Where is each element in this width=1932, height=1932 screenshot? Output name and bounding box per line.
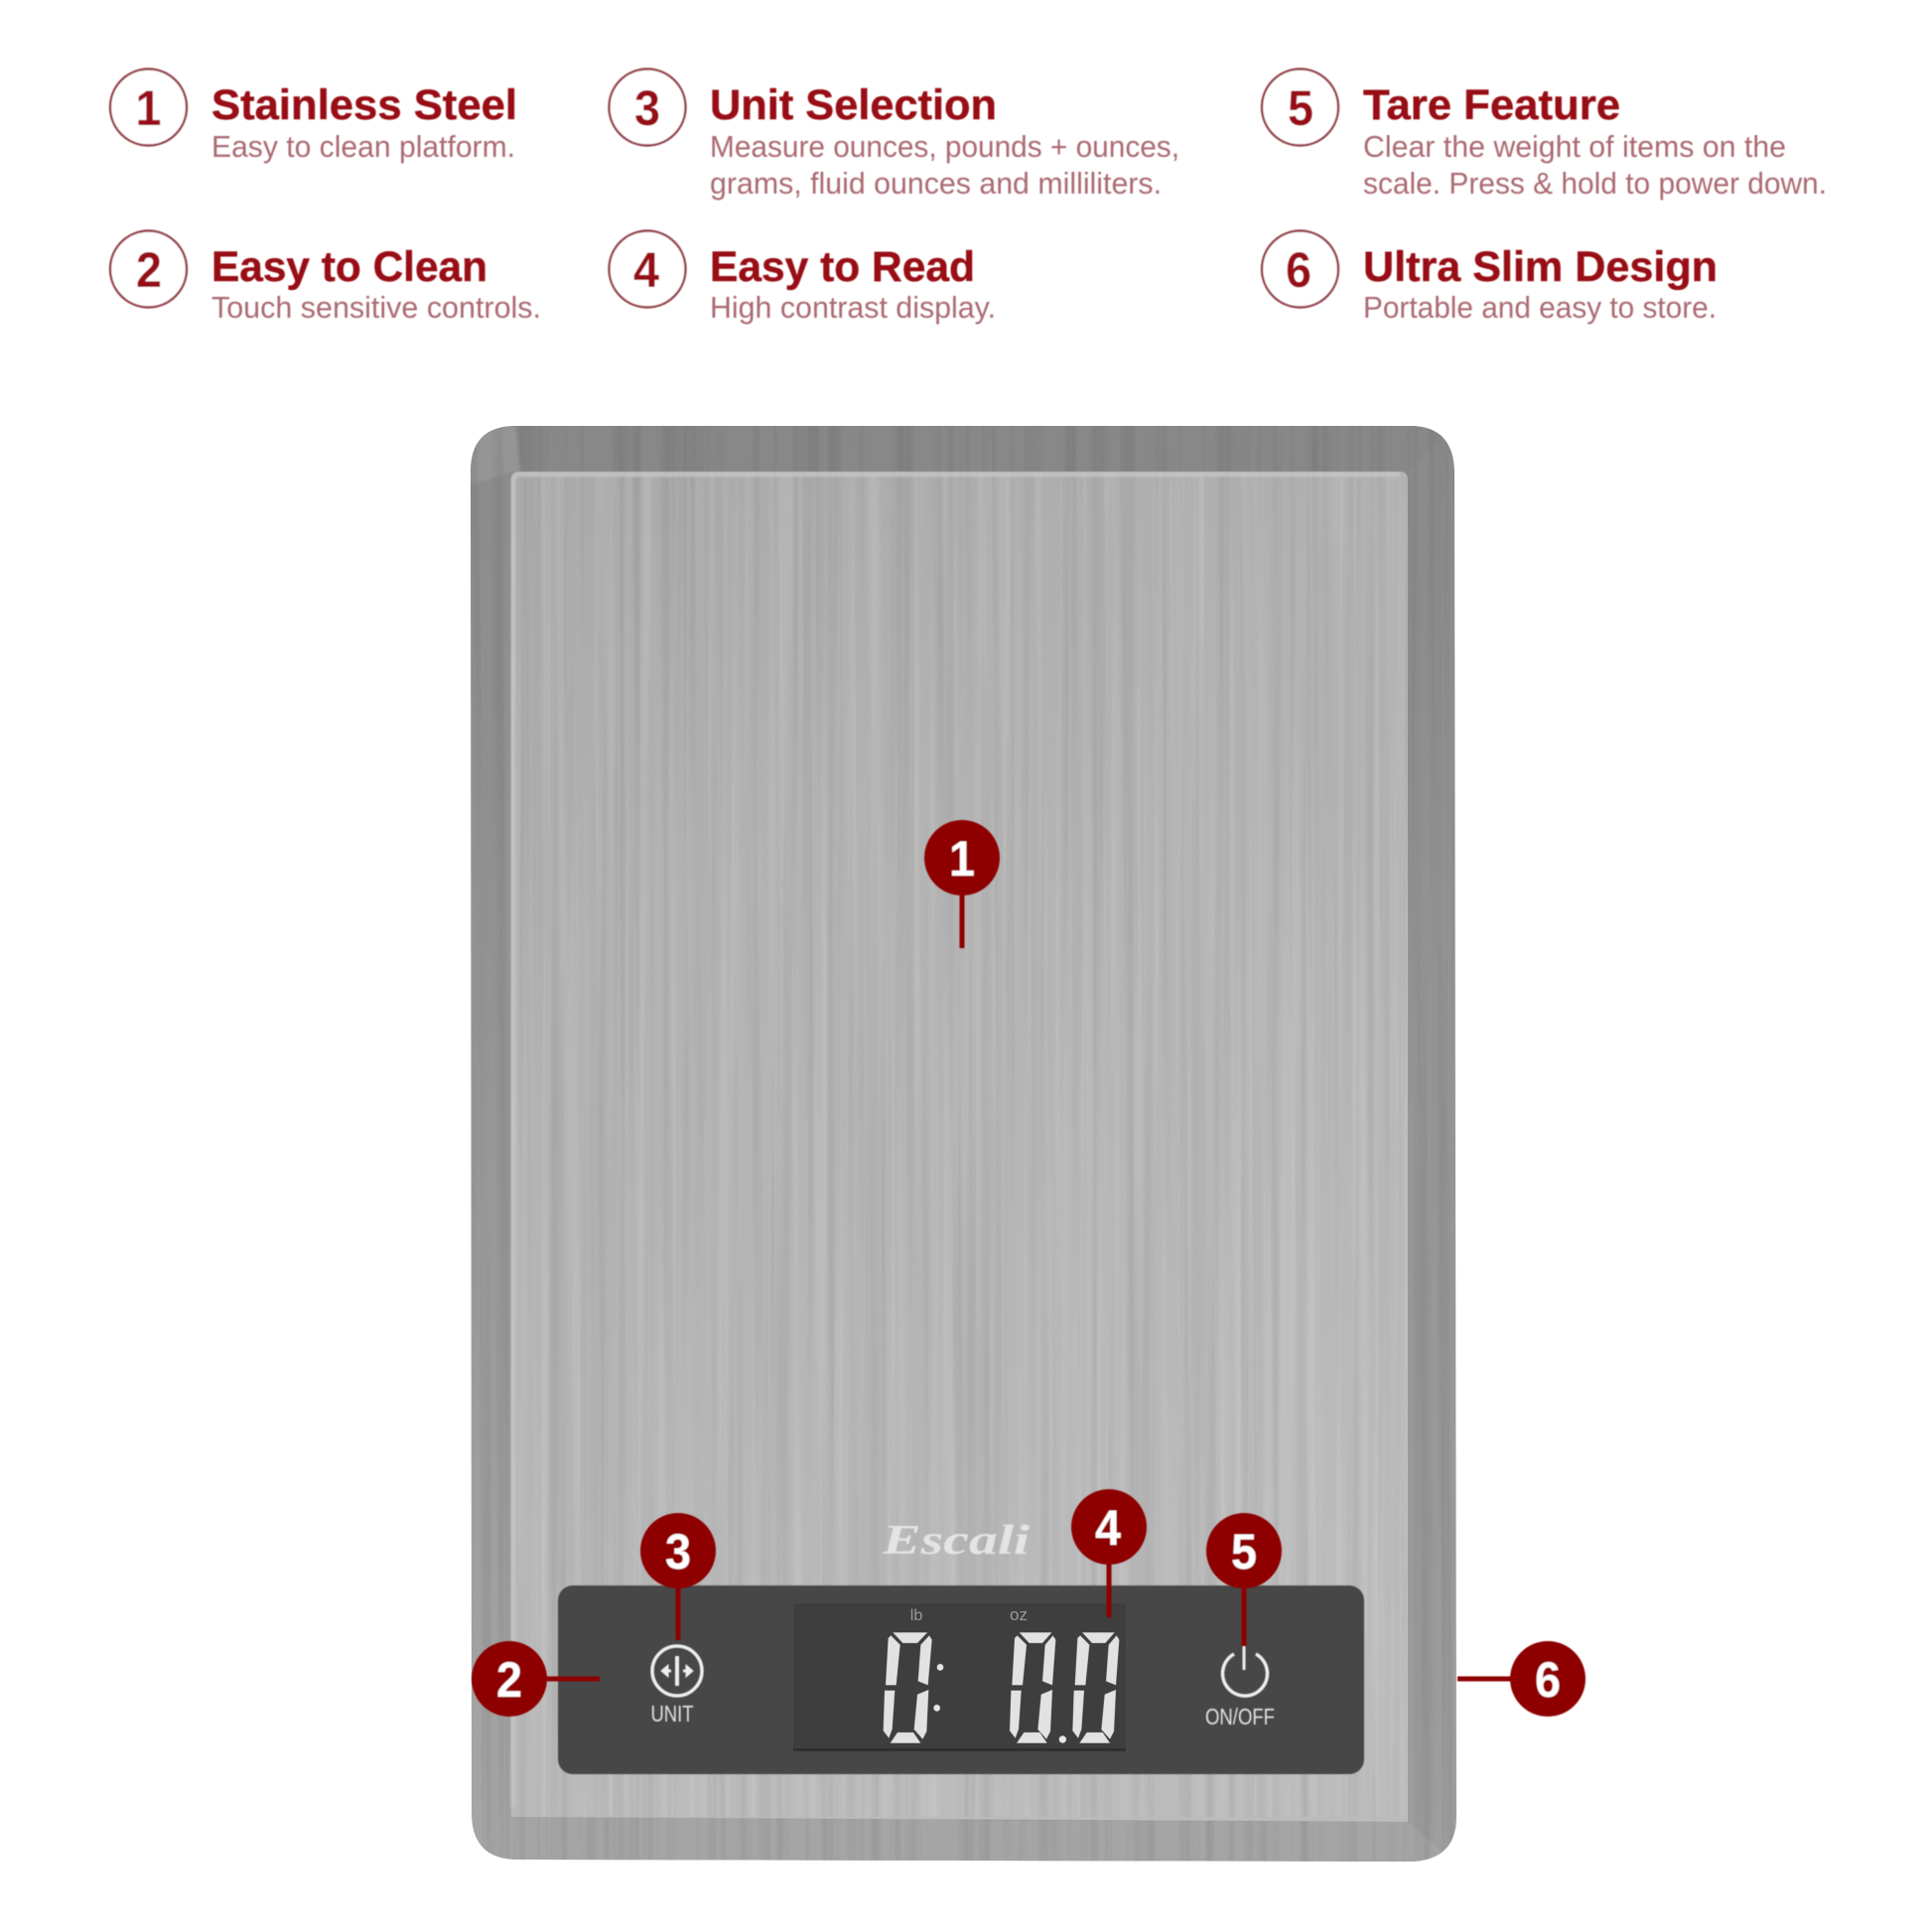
UNIT button icon	[652, 1646, 702, 1696]
legend item 6: Ultra Slim Design	[1262, 230, 1718, 325]
kitchen scale body	[467, 422, 1459, 1866]
callout marker 1	[924, 820, 1000, 948]
power button icon	[1223, 1645, 1268, 1696]
callout marker 5	[1206, 1513, 1282, 1646]
legend item 3: Unit Selection: Measure ounces, pounds + ounces,	[710, 129, 1179, 164]
callout marker 4	[1071, 1489, 1147, 1617]
LCD display	[793, 1603, 1126, 1751]
callout marker 4: 4	[1095, 1500, 1121, 1556]
legend item 5: Tare Feature	[1262, 69, 1827, 201]
legend item 5: Tare Feature: scale. Press & hold to power down.	[1363, 166, 1827, 201]
legend item 1: Stainless Steel: Easy to clean platform.	[211, 129, 515, 164]
legend item 3: Unit Selection: 3	[634, 80, 660, 136]
unit label lb: lb	[910, 1607, 922, 1624]
callout marker 5: 5	[1231, 1524, 1257, 1580]
callout marker 3: 3	[665, 1524, 691, 1580]
legend item 4: Easy to Read: High contrast display.	[710, 290, 996, 325]
legend item 2: Easy to Clean: Easy to Clean	[211, 243, 487, 291]
unit label oz: oz	[1010, 1605, 1028, 1624]
legend item 6: Ultra Slim Design: Ultra Slim Design	[1363, 243, 1718, 291]
callout marker 6	[1457, 1641, 1586, 1717]
callout marker 2	[472, 1641, 600, 1717]
legend item 4: Easy to Read: 4	[633, 242, 659, 298]
legend item 1: Stainless Steel: 1	[135, 80, 161, 136]
legend item 3: Unit Selection	[610, 69, 1179, 201]
legend item 2: Easy to Clean	[110, 230, 541, 325]
legend item 5: Tare Feature: Clear the weight of items on the	[1363, 129, 1786, 164]
legend item 4: Easy to Read: Easy to Read	[710, 243, 975, 291]
seven-segment reading	[884, 1632, 1119, 1743]
legend item 4: Easy to Read	[610, 230, 996, 325]
callout marker 1: 1	[949, 831, 975, 887]
legend item 3: Unit Selection: grams, fluid ounces and milliliters.	[710, 166, 1162, 201]
callout marker 6: 6	[1535, 1652, 1561, 1708]
scale outer bevelled edge	[467, 422, 1459, 1866]
legend item 3: Unit Selection: Unit Selection	[710, 81, 997, 129]
UNIT label: UNIT	[651, 1701, 693, 1726]
callout marker 2: 2	[496, 1652, 522, 1708]
Escali logo: Escali	[882, 1518, 1030, 1564]
legend item 2: Easy to Clean: Touch sensitive controls.	[211, 290, 541, 325]
legend item 5: Tare Feature: Tare Feature	[1363, 81, 1620, 129]
callout marker 3	[640, 1513, 716, 1640]
legend item 5: Tare Feature: 5	[1288, 80, 1313, 136]
legend item 1: Stainless Steel	[110, 69, 517, 164]
legend item 2: Easy to Clean: 2	[136, 242, 162, 298]
legend item 6: Ultra Slim Design: 6	[1286, 242, 1311, 298]
legend item 1: Stainless Steel: Stainless Steel	[211, 81, 517, 129]
legend item 6: Ultra Slim Design: Portable and easy to store.	[1363, 290, 1717, 325]
scale top stainless plate	[511, 472, 1408, 1822]
ON/OFF label: ON/OFF	[1205, 1704, 1275, 1729]
control panel	[558, 1586, 1364, 1776]
